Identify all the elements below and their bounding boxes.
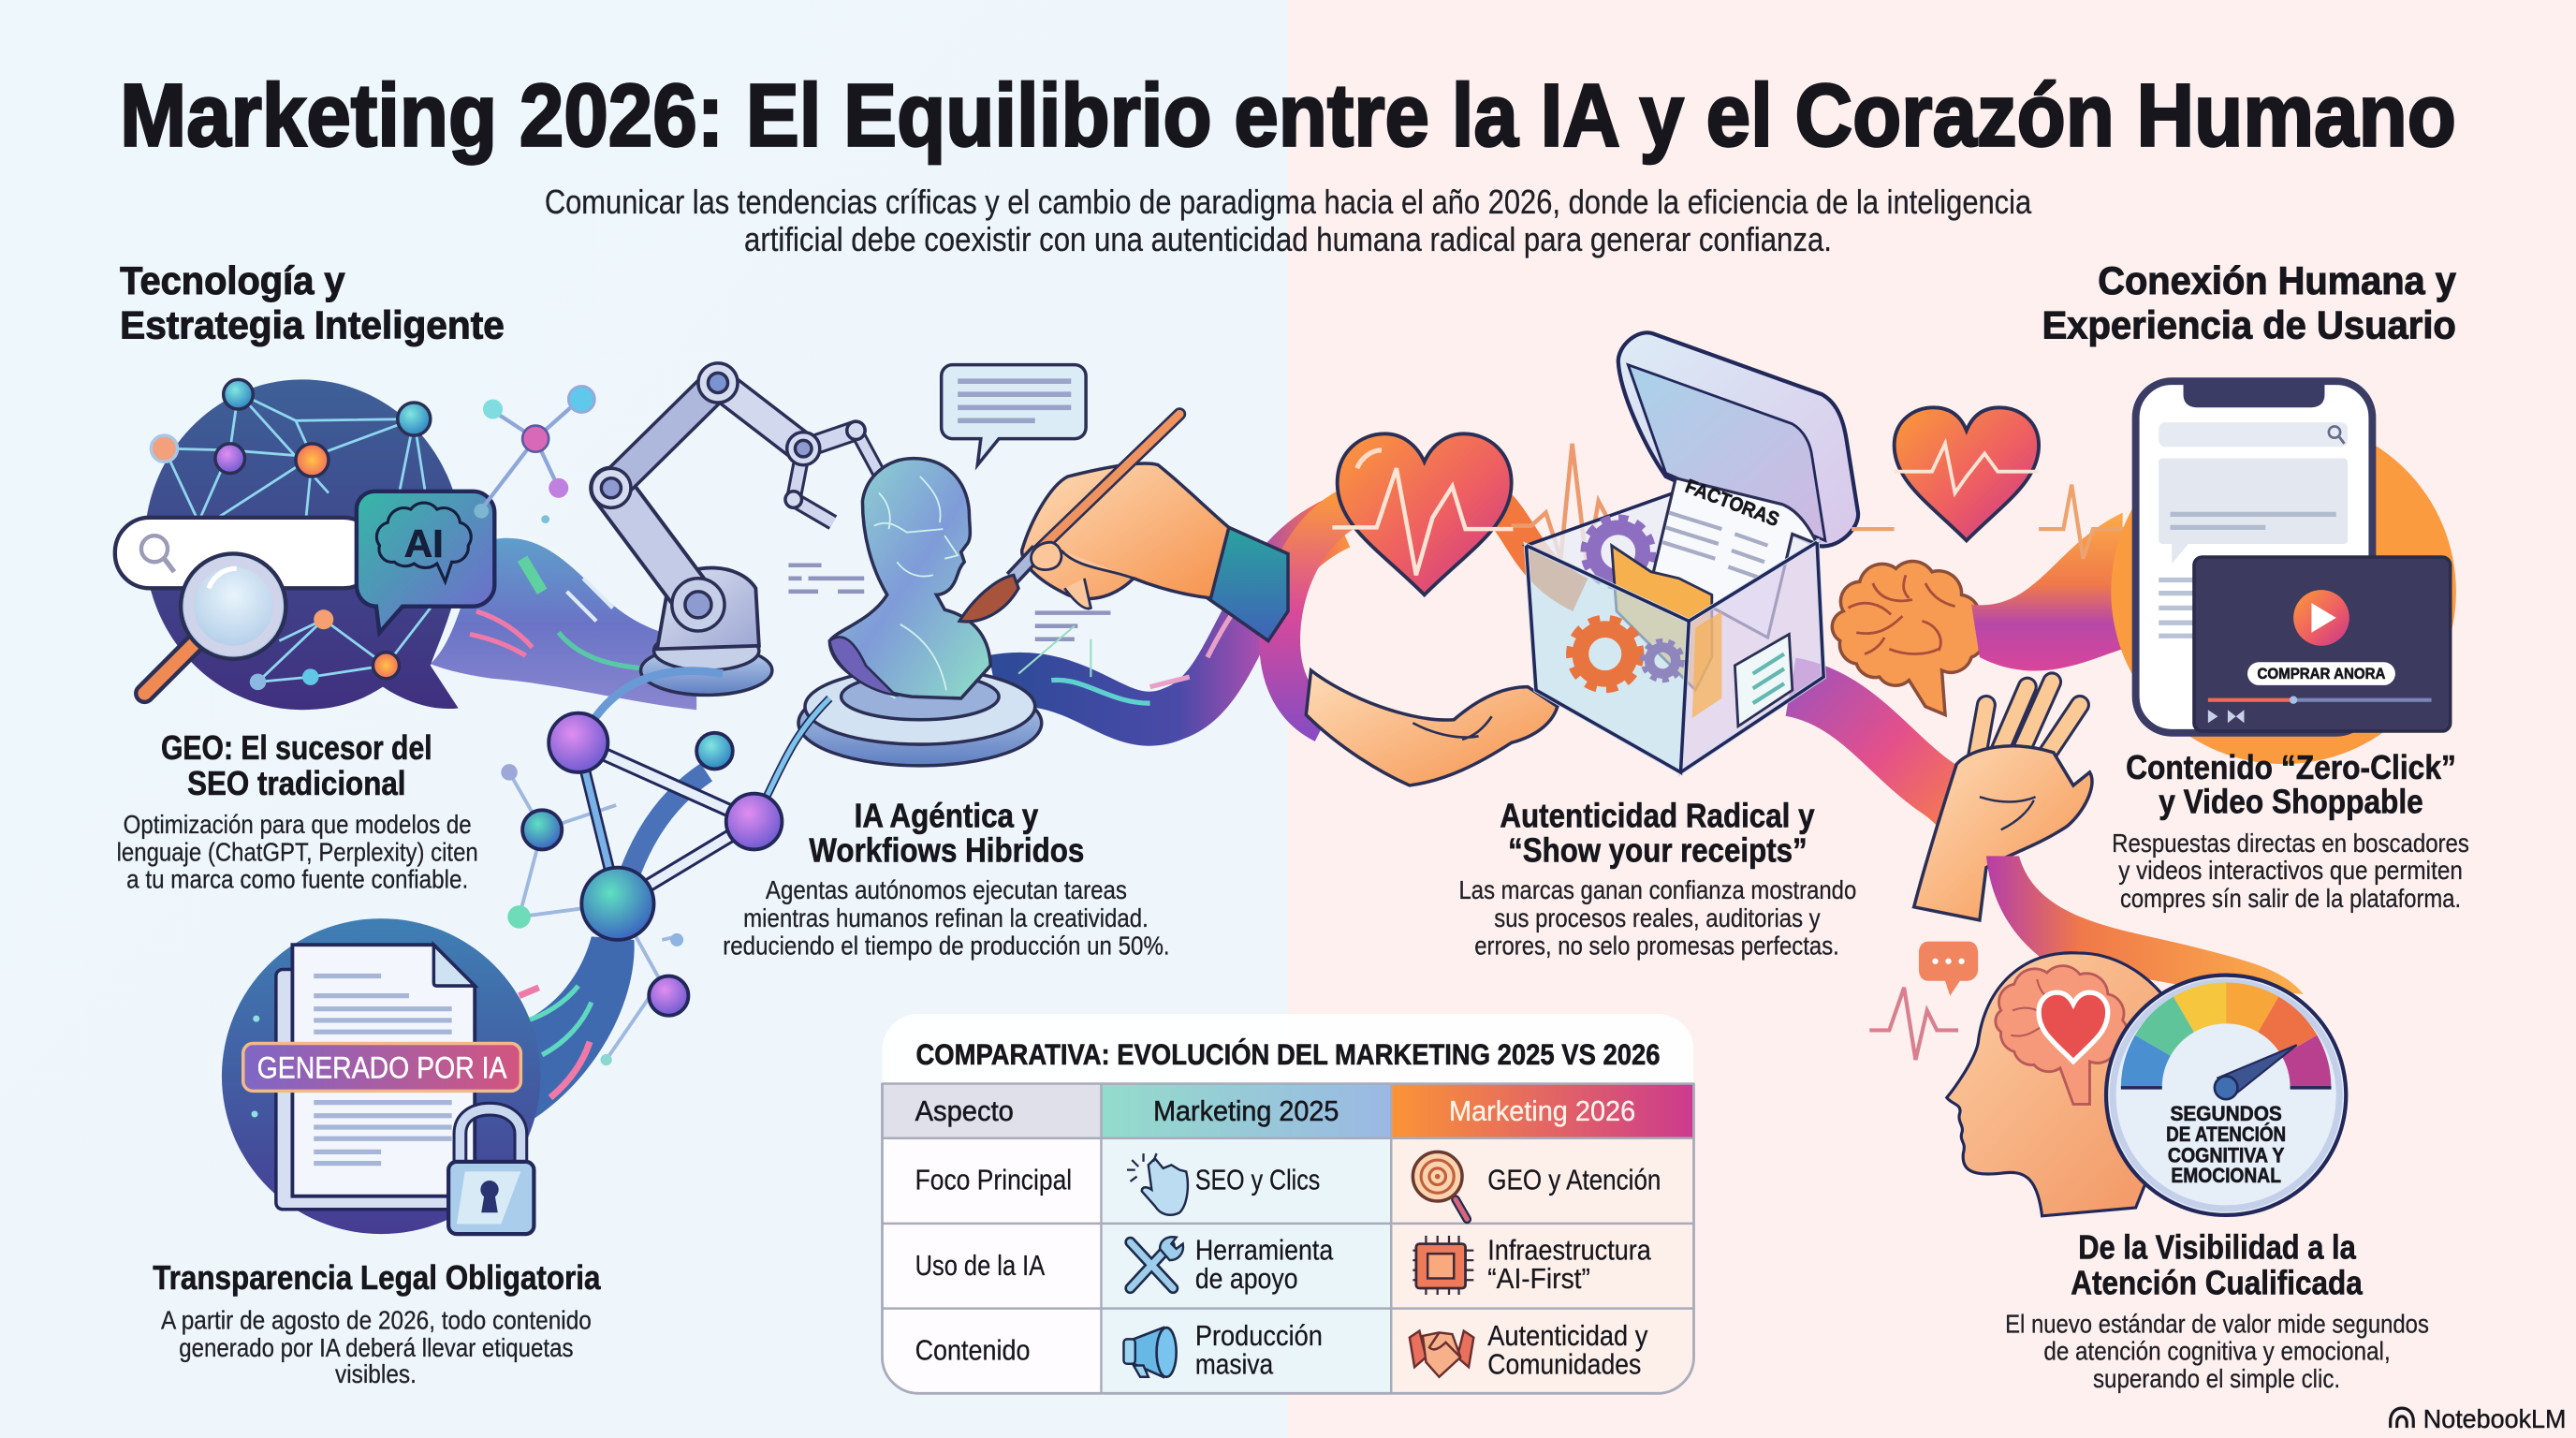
text: agentic AI: mientras humanos refinan la creatividad. <box>743 903 1149 932</box>
text: zero-click: y videos interactivos que permiten <box>2118 856 2463 885</box>
icon: megaphone <box>1123 1328 1177 1377</box>
icon: purple gear <box>1584 518 1653 587</box>
icon: AI brain bubble: AI <box>404 521 444 565</box>
ribbon: hand to gauge <box>1986 856 2304 994</box>
icon: target magnifier <box>1412 1152 1467 1219</box>
text: radical authenticity: sus procesos reales, auditorias y <box>1494 903 1821 932</box>
row: AI use: Uso de la IA <box>915 1249 1046 1282</box>
table title: COMPARATIVA: EVOLUCIÓN DEL MARKETING 2025 VS 2026 <box>915 1037 1661 1071</box>
text: legal transparency <box>153 1258 601 1388</box>
row: AI use: de apoyo <box>1195 1262 1298 1295</box>
text: agentic AI <box>723 797 1170 961</box>
text: zero-click: Respuestas directas en boscadores <box>2112 829 2469 858</box>
watermark: NotebookLM: NotebookLM <box>2423 1404 2566 1433</box>
icon: transparent box with receipts <box>1526 332 1858 772</box>
row: main focus: GEO y Atención <box>1487 1164 1661 1196</box>
panel: comparison table <box>882 1014 1694 1395</box>
subtitle: Comunicar las tendencias críficas y el cambio de paradigma hacia el año 2026, donde la eficiencia de la inteligencia <box>545 183 2031 221</box>
text: zero-click: Contenido “Zero-Click” <box>2126 748 2456 786</box>
icon: gauge dial: COGNITIVA Y <box>2168 1144 2285 1167</box>
row: content: Producción <box>1195 1319 1323 1352</box>
ribbon: AI bubble to robot <box>431 538 696 710</box>
icon: brain with heart <box>1996 966 2128 1104</box>
row: content: Autenticidad y <box>1487 1319 1648 1352</box>
panel: document and legal circle <box>222 918 635 1234</box>
icon: gauge dial: DE ATENCIÓN <box>2166 1123 2286 1146</box>
icon: gauge dial: EMOCIONAL <box>2171 1164 2281 1187</box>
ribbon: box to raised hand <box>1791 687 1991 862</box>
icon: chat bubble and ECG <box>1869 942 1978 1060</box>
section heading: human connection: Experiencia de Usuario <box>2042 303 2456 347</box>
section heading: technology: Tecnología y <box>120 258 345 302</box>
row: AI use: “AI-First” <box>1487 1262 1590 1295</box>
row: main focus: SEO y Clics <box>1195 1164 1320 1196</box>
icon: head silhouette <box>1947 953 2185 1216</box>
section heading: human connection <box>2042 258 2456 347</box>
icon: chip <box>1412 1236 1473 1295</box>
section heading: technology <box>120 258 505 347</box>
section heading: technology: Estrategia Inteligente <box>120 303 505 347</box>
section heading: human connection: Conexión Humana y <box>2098 258 2456 302</box>
text: legal transparency: generado por IA deberá llevar etiquetas <box>179 1333 574 1362</box>
receipt: FACTORAS <box>1682 476 1782 531</box>
panel: phone and video <box>2111 381 2456 764</box>
row: AI use: Infraestructura <box>1487 1233 1652 1266</box>
panel: GEO speech circle <box>115 379 494 710</box>
label: generated by AI <box>243 1043 520 1091</box>
icon: handshake <box>1410 1331 1473 1377</box>
icon: phone <box>2136 381 2372 733</box>
row: content <box>915 1319 1648 1380</box>
icon: AI brain bubble <box>357 492 494 633</box>
label: generated by AI: GENERADO POR IA <box>257 1050 507 1084</box>
text: legal transparency: A partir de agosto de 2026, todo contenido <box>161 1305 592 1334</box>
icon: magnifying glass <box>144 553 285 694</box>
icon: central molecule <box>501 671 829 1065</box>
icon: wrench and screwdriver <box>1131 1237 1183 1288</box>
video card: COMPRAR ANORA <box>2258 665 2385 682</box>
icon: network nodes <box>151 379 431 690</box>
table header <box>915 1094 1635 1127</box>
icon: robot arm <box>592 363 879 695</box>
panel: head and attention gauge <box>1869 942 2346 1216</box>
row: content: Comunidades <box>1487 1347 1641 1380</box>
receipt <box>1653 476 1817 638</box>
text: legal transparency: Transparencia Legal Obligatoria <box>153 1258 601 1297</box>
icon: platform and sculpted bust <box>788 459 1110 766</box>
text: GEO: a tu marca como fuente confiable. <box>126 865 468 894</box>
text: qualified attention: Atención Cualificada <box>2071 1264 2364 1302</box>
text: GEO: GEO: El sucesor del <box>161 728 432 767</box>
text: qualified attention: superando el simple clic. <box>2093 1364 2340 1393</box>
text: qualified attention: De la Visibilidad a la <box>2078 1227 2357 1266</box>
icon: lower open hand <box>1306 670 1558 785</box>
ribbon: brain to phone backdrop <box>1971 513 2123 671</box>
text: GEO: SEO tradicional <box>187 764 406 802</box>
icon: heart right with ECG <box>1852 407 2136 559</box>
text: legal transparency: visibles. <box>335 1359 417 1388</box>
icon: ECG line and heart left <box>1332 433 1643 594</box>
row: content: Contenido <box>915 1333 1030 1366</box>
card with checks <box>1734 634 1793 726</box>
icon: orange gear <box>1570 619 1640 689</box>
text: agentic AI: reduciendo el tiempo de producción un 50%. <box>723 932 1170 961</box>
row: main focus <box>915 1152 1661 1219</box>
icon: hand with brush <box>959 414 1288 640</box>
icon: small molecule top <box>474 386 594 523</box>
video card <box>2194 557 2451 731</box>
text: qualified attention: El nuevo estándar de valor mide segundos <box>2005 1309 2429 1338</box>
icon: gauge dial <box>2106 976 2346 1215</box>
text: GEO <box>117 728 478 894</box>
row: AI use: Herramienta <box>1195 1233 1334 1266</box>
text: GEO: Optimización para que modelos de <box>124 810 472 839</box>
text: qualified attention <box>2005 1227 2429 1393</box>
icon: raised hand <box>1914 682 2092 920</box>
row: content: masiva <box>1195 1347 1274 1380</box>
text: radical authenticity: Las marcas ganan confianza mostrando <box>1459 875 1856 904</box>
text: agentic AI: IA Agéntica y <box>855 797 1038 835</box>
folder <box>1612 546 1712 690</box>
row: AI use <box>915 1233 1652 1295</box>
table header: Marketing 2025 <box>1153 1094 1339 1127</box>
subtitle: artificial debe coexistir con una autenticidad humana radical para generar confianza. <box>744 220 1832 258</box>
text: radical authenticity: Autenticidad Radical y <box>1500 797 1815 835</box>
row: main focus: Foco Principal <box>915 1164 1072 1196</box>
text: GEO: lenguaje (ChatGPT, Perplexity) citen <box>117 838 478 867</box>
text: radical authenticity: errores, no selo promesas perfectas. <box>1474 932 1839 961</box>
ribbon: robot to hearts <box>994 493 1580 723</box>
table header: Marketing 2026 <box>1449 1094 1635 1127</box>
document <box>276 945 475 1210</box>
text: zero-click <box>2112 748 2469 913</box>
subtitle <box>545 183 2031 258</box>
box front <box>1526 546 1689 772</box>
text: agentic AI: Workfiows Hibridos <box>809 831 1084 870</box>
search bar <box>115 518 378 588</box>
icon: gauge dial: SEGUNDOS <box>2170 1102 2282 1125</box>
icon: small grey gear <box>1643 640 1682 681</box>
icon: brain <box>1832 561 1984 714</box>
text: agentic AI: Agentas autónomos ejecutan tareas <box>766 875 1127 904</box>
text: zero-click: compres sín salir de la plataforma. <box>2120 884 2461 913</box>
icon: padlock <box>448 1109 534 1234</box>
text: radical authenticity: “Show your receipts” <box>1508 831 1808 870</box>
text: zero-click: y Video Shoppable <box>2159 782 2423 820</box>
icon: click hand <box>1127 1153 1188 1215</box>
icon: speech bubble with lines <box>942 365 1086 465</box>
text: qualified attention: de atención cognitiva y emocional, <box>2043 1337 2391 1366</box>
text: radical authenticity <box>1459 797 1856 961</box>
table header: Aspecto <box>915 1094 1014 1127</box>
